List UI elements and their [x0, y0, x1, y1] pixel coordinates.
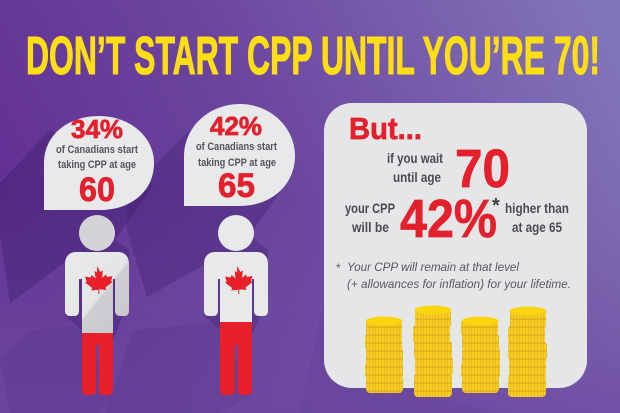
long shadows [0, 130, 500, 413]
speech bubble: 42% at age 65 [184, 104, 295, 206]
coin stack 2 [413, 306, 453, 397]
footnote: (+ allowances for inflation) for your lifetime. [347, 277, 571, 291]
person 2 [204, 215, 268, 395]
text: if you wait until age: until age [393, 169, 441, 185]
person 1 [65, 215, 129, 395]
bubble 1 text line 1: of Canadians start [56, 144, 138, 156]
text: if you wait until age: if you wait [387, 150, 443, 166]
text: higher than at age 65: higher than [505, 200, 569, 216]
coin stack 3 [461, 316, 500, 393]
bubble 2 text line 2: taking CPP at age [198, 157, 276, 169]
bubble 2 age: 65 [218, 167, 255, 205]
coin stack 1 [365, 316, 403, 393]
icon: maple leaf on person 2 [225, 266, 252, 294]
text: your CPP will be: your CPP [345, 200, 395, 216]
panel heading: But... [349, 111, 422, 146]
big number 42%: 42% [400, 189, 497, 249]
coin stack 4 [508, 306, 547, 397]
bubble 1 age: 60 [79, 171, 115, 209]
icon: maple leaf on person 1 [85, 266, 112, 294]
panel: but if you wait [324, 103, 587, 397]
text: higher than at age 65: at age 65 [512, 219, 562, 235]
text: if you wait until age [387, 150, 443, 185]
text: your CPP will be: will be [351, 219, 389, 235]
asterisk: * [492, 195, 500, 217]
bubble 1 percentage: 34% [71, 114, 123, 144]
text: your CPP will be [345, 200, 395, 235]
icon: coin stacks [365, 306, 547, 397]
footnote [336, 260, 571, 291]
speech bubble: 34% at age 60 [44, 114, 154, 210]
bubble 1 text line 2: taking CPP at age [58, 159, 136, 171]
text: higher than at age 65 [505, 200, 569, 235]
big number 70: 70 [455, 139, 510, 199]
bubble 2 percentage: 42% [210, 111, 262, 141]
footnote: Your CPP will remain at that level [347, 260, 519, 274]
bubble 2 text line 1: of Canadians start [196, 141, 277, 153]
footnote: * [336, 261, 341, 275]
